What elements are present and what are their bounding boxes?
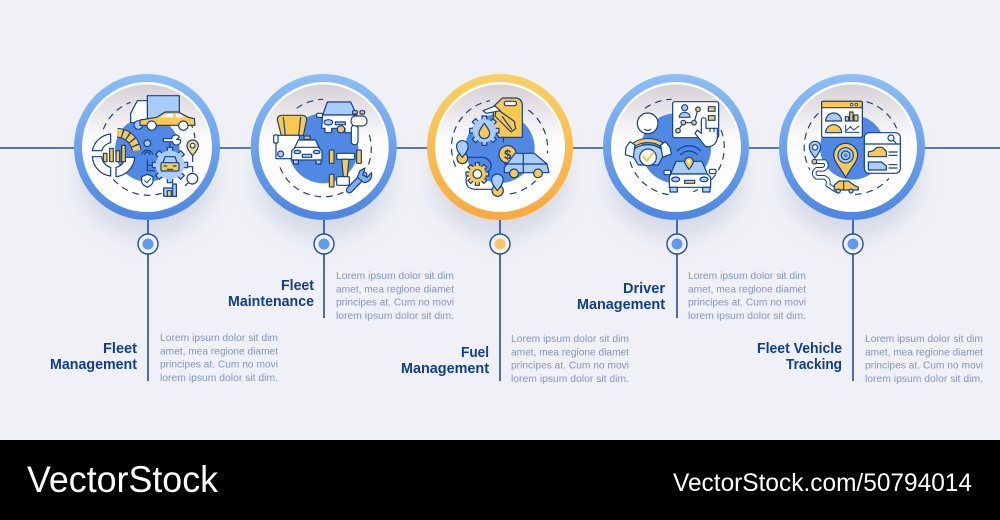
footer band: [0, 440, 1000, 520]
timeline axis: [0, 147, 1000, 149]
text block: principes at. Cum no movi: [336, 297, 454, 309]
heading: Driver: [623, 281, 665, 297]
icon: driver management: [625, 99, 724, 195]
icon: fuel management: [451, 98, 549, 196]
heading: [757, 341, 842, 373]
image id: VectorStock.com/50794014: [673, 469, 972, 497]
text block: lorem ipsum dolor sit dim.: [511, 373, 629, 385]
panel: fleet vehicle tracking: [757, 74, 983, 385]
text block: lorem ipsum dolor sit dim.: [865, 373, 983, 385]
heading: Maintenance: [228, 294, 314, 310]
text block: amet, mea regione diamet: [160, 345, 278, 357]
heading: Management: [50, 357, 137, 373]
node marker: [138, 234, 158, 254]
text block: lorem ipsum dolor sit dim.: [688, 310, 806, 322]
icon: fleet maintenance: [274, 99, 372, 197]
heading: [228, 278, 314, 310]
text block: Lorem ipsum dolor sit dim: [688, 270, 806, 282]
dollar sign: $: [504, 148, 511, 162]
text block: principes at. Cum no movi: [865, 360, 983, 372]
panel: fuel management: [401, 74, 629, 385]
text block: [336, 270, 454, 322]
ring: [74, 74, 220, 220]
heading: [401, 345, 489, 377]
text block: amet, mea regione diamet: [511, 346, 629, 358]
text block: amet, mea regione diamet: [865, 346, 983, 358]
node marker: [490, 234, 510, 254]
text block: [160, 332, 278, 384]
heading: Fuel: [461, 345, 489, 361]
ring: [251, 74, 397, 220]
text block: amet, mea regione diamet: [336, 283, 454, 295]
ring: [779, 74, 925, 220]
text block: principes at. Cum no movi: [160, 359, 278, 371]
heading: Fleet Vehicle: [757, 341, 842, 357]
text block: Lorem ipsum dolor sit dim: [160, 332, 278, 344]
text block: lorem ipsum dolor sit dim.: [160, 372, 278, 384]
heading: [50, 341, 137, 373]
text block: Lorem ipsum dolor sit dim: [865, 333, 983, 345]
heading: Fleet: [281, 278, 314, 294]
text block: Lorem ipsum dolor sit dim: [511, 333, 629, 345]
heading: Management: [577, 297, 665, 313]
ring: [603, 74, 749, 220]
heading: Tracking: [786, 357, 842, 373]
heading: Fleet: [103, 341, 137, 357]
ring: [427, 74, 573, 220]
node marker: [843, 234, 863, 254]
node marker: [667, 234, 687, 254]
icon: fleet vehicle tracking: [804, 101, 900, 194]
heading: Management: [401, 361, 489, 377]
panel: driver management: [577, 74, 806, 322]
logo wordmark: VectorStock: [27, 459, 218, 500]
heading: [577, 281, 665, 313]
text block: principes at. Cum no movi: [511, 360, 629, 372]
text block: principes at. Cum no movi: [688, 297, 806, 309]
text block: [511, 333, 629, 385]
panel: fleet management: [50, 74, 278, 384]
text block: amet, mea regione diamet: [688, 283, 806, 295]
node marker: [314, 234, 334, 254]
panel: fleet maintenance: [228, 74, 454, 322]
text block: Lorem ipsum dolor sit dim: [336, 270, 454, 282]
text block: [865, 333, 983, 385]
text block: [688, 270, 806, 322]
icon: fleet management: [92, 96, 198, 196]
text block: lorem ipsum dolor sit dim.: [336, 310, 454, 322]
